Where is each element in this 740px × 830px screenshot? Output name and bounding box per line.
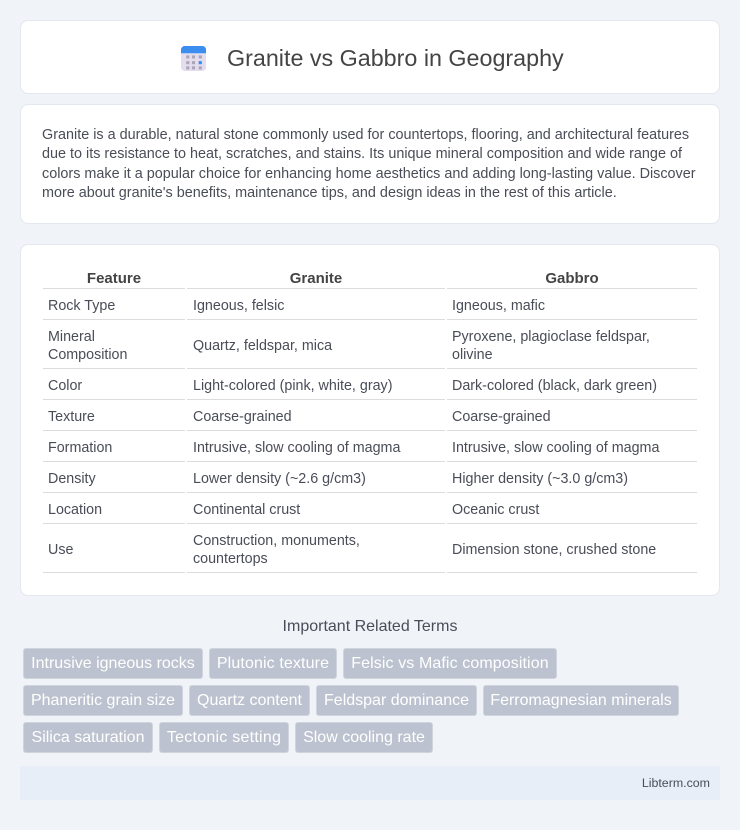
table rows: countertops	[193, 551, 268, 567]
title: Granite vs Gabbro in Geography	[227, 45, 564, 71]
footer	[20, 766, 720, 800]
table rows: Location	[48, 502, 102, 518]
table rows: Texture	[48, 409, 95, 425]
table rows: Color	[48, 378, 82, 394]
intro paragraph	[42, 127, 696, 201]
heading: related terms: Important Related Terms	[283, 618, 457, 635]
table rows: Dimension stone, crushed stone	[452, 542, 656, 558]
intro paragraph: Granite is a durable, natural stone commonly used for countertops, flooring, and architectural features	[42, 127, 689, 143]
tags: related terms: Ferromagnesian minerals	[490, 692, 672, 709]
table rows: Density	[48, 471, 96, 487]
table header: Granite	[290, 270, 342, 287]
table rows: Intrusive, slow cooling of magma	[452, 440, 659, 456]
table rows: Oceanic crust	[452, 502, 539, 518]
tags: related terms: Quartz content	[197, 692, 302, 709]
table header: Gabbro	[545, 270, 599, 287]
table rows: Mineral	[48, 329, 95, 345]
intro paragraph: due to its resistance to heat, scratches, and stains. Its unique mineral composition and wide range of	[42, 146, 682, 162]
table rows: Lower density (~2.6 g/cm3)	[193, 471, 366, 487]
table rows: Light-colored (pink, white, gray)	[193, 378, 392, 394]
table rows: Pyroxene, plagioclase feldspar,	[452, 329, 650, 345]
panel: title header	[20, 20, 720, 94]
table rows: Igneous, mafic	[452, 298, 545, 314]
table rows: Higher density (~3.0 g/cm3)	[452, 471, 628, 487]
table rows: Intrusive, slow cooling of magma	[193, 440, 400, 456]
intro paragraph: more about granite's benefits, maintenance tips, and design ideas in the rest of this article.	[42, 185, 617, 201]
table header: Feature	[87, 270, 141, 287]
tags: related terms: Intrusive igneous rocks	[31, 655, 195, 672]
table rows: olivine	[452, 347, 493, 363]
table rows: Igneous, felsic	[193, 298, 284, 314]
tags: related terms: Tectonic setting	[167, 729, 281, 746]
table rows: Coarse-grained	[452, 409, 551, 425]
table rows: Coarse-grained	[193, 409, 292, 425]
icon: calendar	[181, 46, 206, 71]
tags: related terms: Feldspar dominance	[324, 692, 469, 709]
tags: related terms: Plutonic texture	[217, 655, 329, 672]
tags: related terms: Silica saturation	[32, 729, 144, 746]
table rows: Dark-colored (black, dark green)	[452, 378, 657, 394]
tags: related terms: Phaneritic grain size	[31, 692, 175, 709]
panel: comparison table	[20, 244, 720, 596]
intro paragraph: colors make it a popular choice for enhancing home aesthetics and adding long-lasting value. Discover	[42, 166, 696, 182]
tags: related terms: Felsic vs Mafic composition	[351, 655, 549, 672]
table rows: Formation	[48, 440, 112, 456]
table rows: Rock Type	[48, 298, 115, 314]
table header	[87, 270, 599, 287]
table rows: Composition	[48, 347, 127, 363]
tags: related terms	[23, 648, 679, 753]
footer credit: Libterm.com	[642, 776, 710, 790]
table rows: Use	[48, 542, 73, 558]
panel: intro text	[20, 104, 720, 224]
table rows: Construction, monuments,	[193, 533, 360, 549]
table rows: Quartz, feldspar, mica	[193, 338, 332, 354]
tags: related terms: Slow cooling rate	[303, 729, 425, 746]
table rows	[43, 288, 697, 573]
table rows: Continental crust	[193, 502, 300, 518]
